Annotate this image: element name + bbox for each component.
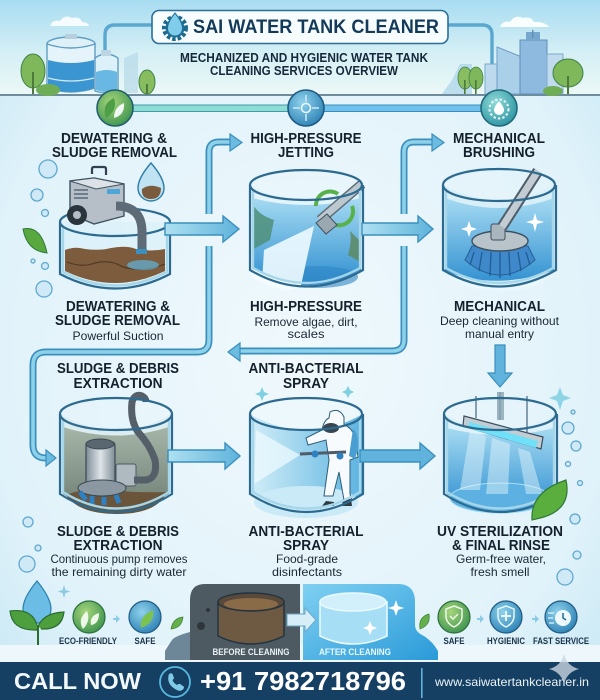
tank 3: mechanical brushing xyxy=(443,169,556,291)
label: mechanical description: MECHANICAL xyxy=(454,299,545,315)
icon: drop gear badge xyxy=(481,90,517,126)
technician in protective suit xyxy=(300,410,358,506)
label: dewatering description xyxy=(55,299,180,343)
label: high-pressure description xyxy=(250,299,362,341)
heading: anti-bacterial spray: ANTI-BACTERIAL xyxy=(248,361,364,377)
arrow: mechanical down to UV xyxy=(488,345,512,387)
label: UV description: fresh smell xyxy=(470,565,530,579)
tank 6: UV sterilization and final rinse xyxy=(444,392,567,520)
disinfectant spray xyxy=(254,430,300,484)
heading: sludge and debris: SLUDGE & DEBRIS xyxy=(57,361,179,377)
panel: after cleaning xyxy=(303,584,438,660)
arrow: down-left pipe to sludge tank xyxy=(33,246,209,466)
after label: AFTER CLEANING xyxy=(319,647,391,658)
green leaf xyxy=(532,480,567,520)
badge: hygienic: HYGIENIC xyxy=(487,636,525,647)
heading: sludge and debris: EXTRACTION xyxy=(74,376,162,392)
discharge hose xyxy=(132,395,156,480)
call to action bar xyxy=(0,654,600,700)
title box xyxy=(152,10,448,44)
before label: BEFORE CLEANING xyxy=(212,647,290,658)
top heading: step 3: MECHANICAL xyxy=(453,131,545,147)
dirty tank xyxy=(218,593,284,644)
pipe from left tank to title xyxy=(105,25,152,52)
storage tanks xyxy=(47,34,118,93)
label: spray description: ANTI-BACTERIAL xyxy=(248,524,364,540)
label: UV description: & FINAL RINSE xyxy=(452,538,550,554)
subtitle: CLEANING SERVICES OVERVIEW xyxy=(210,64,398,78)
badge: eco-friendly: ECO-FRIENDLY xyxy=(59,636,118,647)
tank 5: anti-bacterial spray xyxy=(250,398,363,518)
bubbles: lower left xyxy=(19,517,41,572)
small arrow and sparkle: left badges xyxy=(58,585,120,623)
water jet xyxy=(262,226,314,290)
label: sludge extraction description xyxy=(50,524,188,579)
top heading: step 2 xyxy=(250,131,362,161)
pipe from title to city xyxy=(448,25,492,95)
icon: nozzle target badge xyxy=(288,90,324,126)
city skyline xyxy=(442,30,563,94)
subtitle: MECHANIZED AND HYGIENIC WATER TANK xyxy=(180,51,428,65)
label: mechanical description: manual entry xyxy=(465,327,534,341)
label: UV description xyxy=(437,524,563,579)
arrow: pipe from mechanical back to spray xyxy=(228,246,404,361)
nozzle lance xyxy=(316,184,362,234)
label: high-pressure description: Remove algae, dirt, xyxy=(254,315,358,329)
arrow: tank 2 to tank 3 xyxy=(362,216,433,242)
badge: safe left xyxy=(129,601,161,647)
label: spray description: SPRAY xyxy=(283,538,329,554)
small leaf right of panel xyxy=(420,614,429,629)
pump machine xyxy=(67,167,124,225)
website: www.saiwatertankcleaner.in xyxy=(434,675,589,689)
top heading: step 3 xyxy=(453,131,545,161)
badge: safe left: SAFE xyxy=(134,636,156,647)
label: UV description: UV STERILIZATION xyxy=(437,524,563,540)
tank 2: high-pressure jetting xyxy=(250,170,363,290)
label: high-pressure description: HIGH-PRESSURE xyxy=(250,299,362,315)
top heading: step 1: DEWATERING & xyxy=(61,131,168,147)
green rotation arrows xyxy=(316,191,353,225)
top heading: step 1 xyxy=(52,131,177,161)
subtitle xyxy=(180,51,428,78)
label: UV description: Germ-free water, xyxy=(456,552,546,566)
arrow: tank 4 to tank 5 xyxy=(168,443,240,469)
top heading: step 2: JETTING xyxy=(278,145,334,161)
tank 1: dewatering and sludge removal xyxy=(60,163,170,288)
UV lamp fixture xyxy=(463,392,543,449)
label: dewatering description: Powerful Suction xyxy=(72,329,164,343)
label: spray description: disinfectants xyxy=(272,565,342,579)
watermark sparkle xyxy=(549,654,579,684)
pale band behind bottom strip xyxy=(0,645,600,662)
cloud left xyxy=(50,17,89,26)
arrow: tank 5 to tank 6 xyxy=(360,443,435,469)
badge: hygienic xyxy=(487,601,525,647)
icon: dirty water droplet xyxy=(138,163,164,201)
company name: SAI WATER TANK CLEANER xyxy=(193,17,439,38)
label: mechanical description: Deep cleaning without xyxy=(440,314,560,328)
badge: eco-friendly xyxy=(59,601,118,647)
badge: safe right xyxy=(438,601,470,647)
label: high-pressure description: scales xyxy=(288,327,324,341)
label: spray description xyxy=(248,524,364,579)
panel: before cleaning xyxy=(165,584,300,660)
bubbles and leaf: left of tank 1 xyxy=(23,160,57,297)
arrow: before to after xyxy=(287,608,316,632)
cloud right xyxy=(500,17,549,27)
badge: fast service xyxy=(533,601,589,647)
label: mechanical description xyxy=(440,299,560,341)
phone number: +91 7982718796 xyxy=(200,666,406,696)
label: sludge extraction description: SLUDGE & DEBRIS xyxy=(57,524,179,540)
rotary brush xyxy=(465,171,538,278)
top heading: step 1: SLUDGE REMOVAL xyxy=(52,145,177,161)
heading: anti-bacterial spray: SPRAY xyxy=(283,376,329,392)
suction hose xyxy=(116,206,142,250)
arrow: return pipe to mechanical heading xyxy=(404,134,444,214)
small leaf left of panel xyxy=(171,617,183,629)
top heading: step 3: BRUSHING xyxy=(463,145,535,161)
icon: drop with leaves xyxy=(10,581,64,645)
arrow: tank 1 to tank 2 xyxy=(165,216,239,242)
label: spray description: Food-grade xyxy=(276,552,338,566)
trees left xyxy=(21,54,155,96)
top heading: step 2: HIGH-PRESSURE xyxy=(250,131,362,147)
bubbles and sparkle: right side xyxy=(549,387,582,585)
label: sludge extraction description: EXTRACTION xyxy=(74,538,162,554)
arrow: return pipe to high-pressure heading xyxy=(209,134,242,214)
label: sludge extraction description: Continuous pump removes xyxy=(50,552,188,566)
tank 4: sludge and debris extraction xyxy=(60,395,172,514)
connector bar between top icons xyxy=(133,105,481,112)
call now text: CALL NOW xyxy=(14,668,141,694)
heading: sludge and debris xyxy=(57,361,179,392)
heading: anti-bacterial spray xyxy=(248,361,364,392)
badge: fast service: FAST SERVICE xyxy=(533,636,589,647)
UV light beams xyxy=(460,430,542,494)
header banner scene xyxy=(0,0,600,96)
label: sludge extraction description: the remaining dirty water xyxy=(52,565,187,579)
clean tank xyxy=(320,593,387,644)
trees right xyxy=(458,59,583,96)
icon: phone xyxy=(160,667,190,697)
label: dewatering description: DEWATERING & xyxy=(66,299,170,315)
icon: leaves badge xyxy=(97,90,133,126)
sparkles near tank 4 and 5 xyxy=(255,386,354,401)
badge: safe right: SAFE xyxy=(444,636,464,647)
icon: gear and water drop logo xyxy=(164,13,186,39)
small arrows: right badges xyxy=(477,615,539,623)
submersible pump xyxy=(78,439,136,505)
faint background building left xyxy=(124,52,138,93)
label: dewatering description: SLUDGE REMOVAL xyxy=(55,313,180,329)
